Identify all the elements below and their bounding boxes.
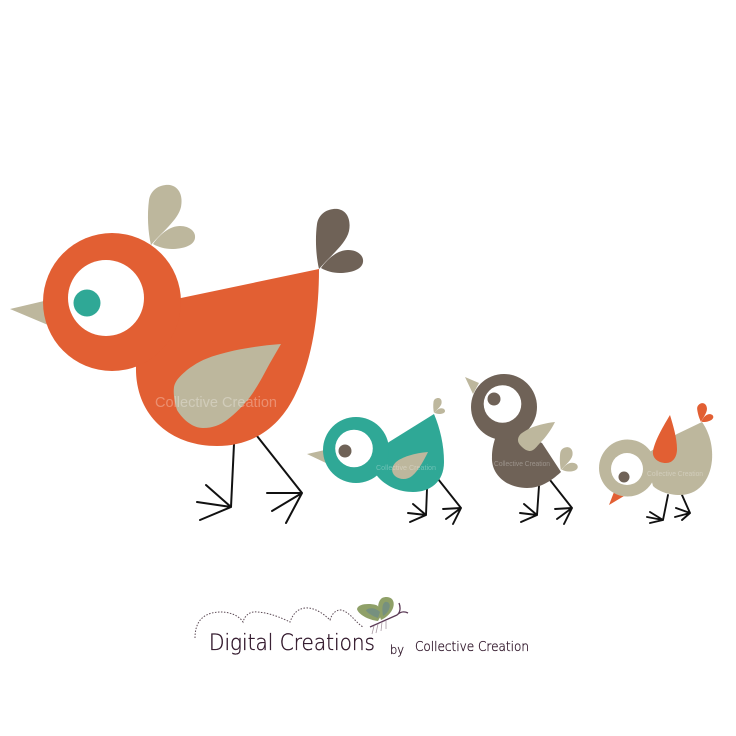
wing: [392, 452, 428, 479]
large orange bird: [10, 185, 363, 523]
watermark: Collective Creation: [647, 469, 703, 478]
watermark: Collective Creation: [155, 394, 277, 411]
eye: [68, 260, 144, 336]
icon: butterfly: [357, 597, 408, 634]
legs: [197, 436, 302, 523]
dotted flight path: [195, 608, 363, 638]
legs: [647, 495, 690, 523]
legs: [408, 479, 461, 524]
tail feathers: [560, 447, 578, 472]
icon: brown tail feathers: [316, 209, 363, 273]
eye: [484, 385, 521, 423]
head: [471, 374, 537, 440]
head: [43, 233, 181, 371]
wing: [174, 344, 281, 428]
eye: [611, 453, 643, 485]
body: [120, 269, 319, 446]
pupil: [74, 290, 100, 316]
pupil: [488, 392, 500, 406]
brown bird: [465, 374, 578, 524]
legs: [520, 480, 572, 524]
watermark: Collective Creation: [376, 463, 436, 472]
beak: [465, 377, 479, 394]
body: [645, 422, 712, 495]
byline: Collective Creation: Collective Creation: [415, 640, 529, 655]
teal bird: [307, 398, 461, 524]
beak: [10, 301, 48, 325]
pupil: [338, 444, 352, 458]
wing: [518, 422, 555, 451]
watermark: Collective Creation: [494, 459, 550, 468]
byline: by: by: [390, 643, 404, 657]
beak: [307, 450, 326, 463]
eye: [335, 430, 373, 467]
beak: [609, 492, 624, 505]
brand name: Digital Creations: [209, 631, 375, 656]
tail feathers: [433, 398, 445, 414]
beige bird: [599, 401, 714, 523]
head: [323, 417, 389, 483]
body: [365, 414, 444, 492]
body: [492, 425, 561, 488]
pupil: [618, 472, 630, 482]
head: [599, 440, 656, 496]
logo: [195, 597, 529, 657]
icon: beige crest: [148, 185, 195, 249]
wing: [653, 415, 677, 463]
icon: orange heart tail: [696, 401, 714, 423]
